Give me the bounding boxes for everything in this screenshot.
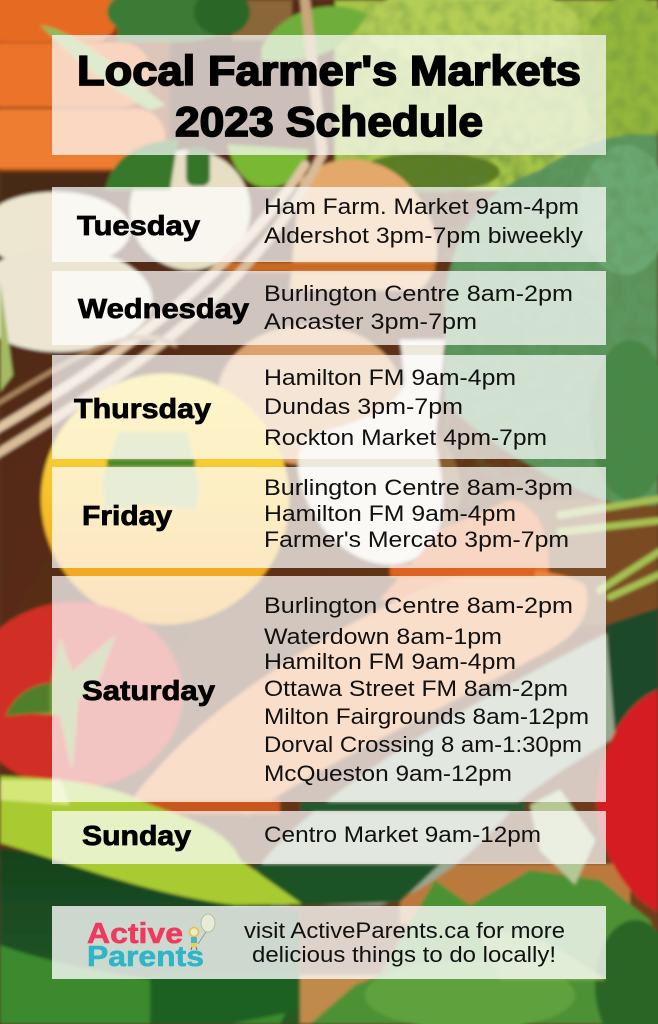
Sunday market: Centro Market 9am-12pm xyxy=(264,822,541,847)
basil leaves xyxy=(40,0,367,190)
panel: title xyxy=(52,35,606,155)
logo: Active Parents xyxy=(87,914,215,973)
green chili pepper xyxy=(0,776,302,905)
Wednesday markets xyxy=(264,281,573,334)
basket weave top xyxy=(0,0,292,210)
day label: Sunday: Sunday xyxy=(82,820,191,851)
Friday markets: Farmer's Mercato 3pm-7pm xyxy=(264,527,569,552)
Friday markets: Hamilton FM 9am-4pm xyxy=(264,501,516,526)
panel: Sunday xyxy=(52,811,606,864)
Tuesday markets: Aldershot 3pm-7pm biweekly xyxy=(264,223,583,248)
Friday markets xyxy=(264,475,573,552)
basket handle xyxy=(0,0,322,455)
Tuesday markets xyxy=(264,194,583,248)
carrots behind garlic xyxy=(380,500,549,600)
heading line 2: 2023 Schedule xyxy=(175,98,483,145)
zucchini xyxy=(250,608,658,906)
footer message xyxy=(244,918,565,967)
broccoli xyxy=(445,134,658,505)
panel: Wednesday xyxy=(52,271,606,345)
Thursday markets: Hamilton FM 9am-4pm xyxy=(264,365,516,390)
day label: Thursday: Thursday xyxy=(74,393,211,424)
panel: Thursday xyxy=(52,355,606,459)
tomato xyxy=(0,602,183,788)
day label: Saturday: Saturday xyxy=(82,675,215,706)
right wood strip xyxy=(290,500,658,1024)
panel: Saturday xyxy=(52,576,606,802)
garlic bulb and stalk xyxy=(298,340,445,564)
carrots lower xyxy=(128,565,587,815)
Thursday markets xyxy=(264,365,547,450)
Saturday markets: Dorval Crossing 8 am-1:30pm xyxy=(264,732,582,757)
yellow squash xyxy=(41,374,289,624)
footer message: visit ActiveParents.ca for more xyxy=(244,918,565,943)
Saturday markets: Burlington Centre 8am-2pm xyxy=(264,593,573,618)
day label: Friday: Friday xyxy=(82,500,172,531)
green stems xyxy=(560,498,658,597)
onions xyxy=(0,150,250,392)
Saturday markets: Waterdown 8am-1pm xyxy=(264,624,502,649)
Saturday markets: Hamilton FM 9am-4pm xyxy=(264,649,516,674)
panel: footer xyxy=(52,906,606,979)
heading line 1: Local Farmer's Markets xyxy=(77,47,581,94)
Saturday markets: Milton Fairgrounds 8am-12pm xyxy=(264,704,589,729)
carrots top-left xyxy=(0,0,172,172)
Saturday markets: Ottawa Street FM 8am-2pm xyxy=(264,676,568,701)
logo: Active Parents: Active xyxy=(87,918,183,950)
Thursday markets: Rockton Market 4pm-7pm xyxy=(264,425,547,450)
Wednesday markets: Ancaster 3pm-7pm xyxy=(264,309,477,334)
icon: girl with balloon xyxy=(190,914,215,950)
cucumbers xyxy=(0,848,300,1024)
Tuesday markets: Ham Farm. Market 9am-4pm xyxy=(264,194,579,219)
Saturday markets xyxy=(264,593,589,786)
Friday markets: Burlington Centre 8am-3pm xyxy=(264,475,573,500)
panel: Tuesday xyxy=(52,187,606,262)
day label: Wednesday: Wednesday xyxy=(78,293,249,324)
day label: Tuesday: Tuesday xyxy=(77,210,200,241)
lettuce xyxy=(335,0,658,192)
logo: Active Parents: Parents xyxy=(87,941,204,973)
Wednesday markets: Burlington Centre 8am-2pm xyxy=(264,281,573,306)
Thursday markets: Dundas 3pm-7pm xyxy=(264,394,463,419)
red pepper xyxy=(597,690,658,912)
footer message: delicious things to do locally! xyxy=(252,942,556,967)
potatoes xyxy=(218,160,460,550)
parsley xyxy=(310,790,658,1024)
panel: Friday xyxy=(52,467,606,568)
Saturday markets: McQueston 9am-12pm xyxy=(264,761,512,786)
